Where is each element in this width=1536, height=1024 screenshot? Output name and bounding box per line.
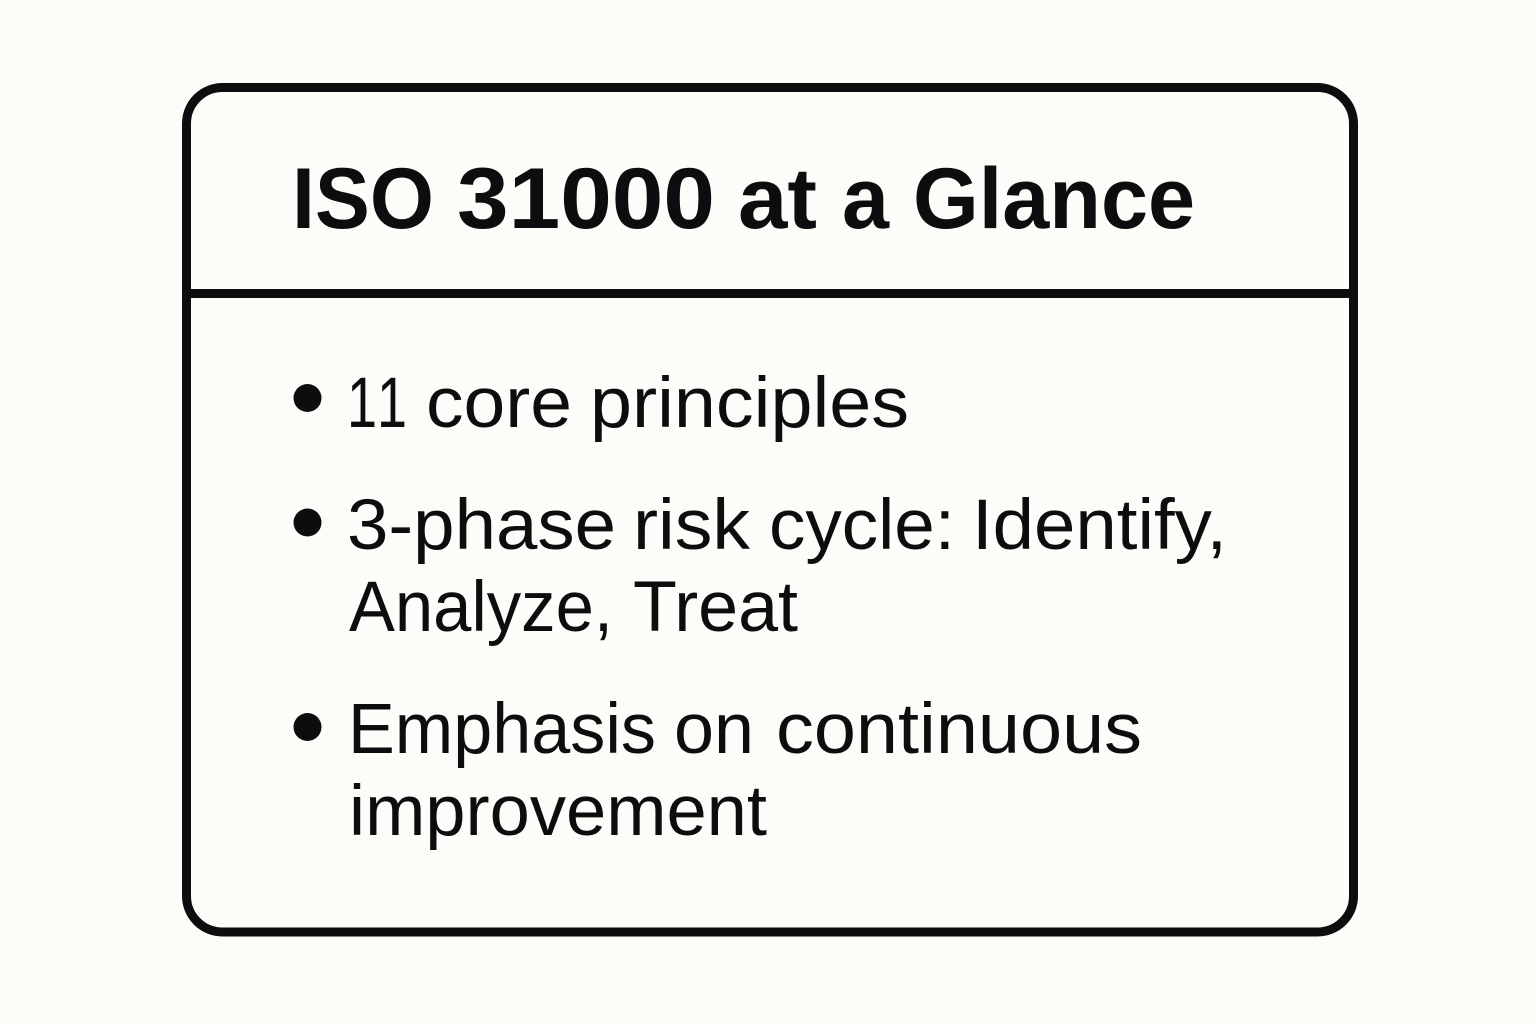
title: ISO (292, 151, 434, 247)
bullet: continuous improvement (294, 690, 1142, 851)
bullet list (294, 364, 1227, 851)
bullet: 11 core principles: principles (590, 364, 909, 443)
title: a (842, 151, 890, 247)
title: Glance (913, 151, 1195, 247)
bullet: continuous improvement: continuous (776, 690, 1142, 769)
title: 31000 (457, 151, 715, 247)
bullet: 11 core principles (294, 364, 909, 443)
bullet: 3-phase risk cycle: Identify, (972, 486, 1227, 565)
bullet: 11 core principles: 11 (347, 364, 407, 443)
bullet: continuous improvement: improvement (349, 772, 767, 851)
bullet: continuous improvement: on (674, 690, 754, 769)
title: at (738, 151, 817, 247)
bullet: 3-phase risk cycle: 3-phase (347, 486, 616, 565)
bullet: 11 core principles: core (426, 364, 572, 443)
bullet: 3-phase risk cycle (294, 486, 1227, 647)
bullet: 3-phase risk cycle: Analyze, (349, 568, 613, 647)
bullet: 3-phase risk cycle: risk (633, 486, 751, 565)
panel: ISO 31000 card (186, 88, 1354, 932)
bullet: continuous improvement: Emphasis (348, 690, 656, 769)
bullet: 3-phase risk cycle: cycle: (769, 486, 955, 565)
bullet: 3-phase risk cycle: Treat (633, 568, 798, 647)
